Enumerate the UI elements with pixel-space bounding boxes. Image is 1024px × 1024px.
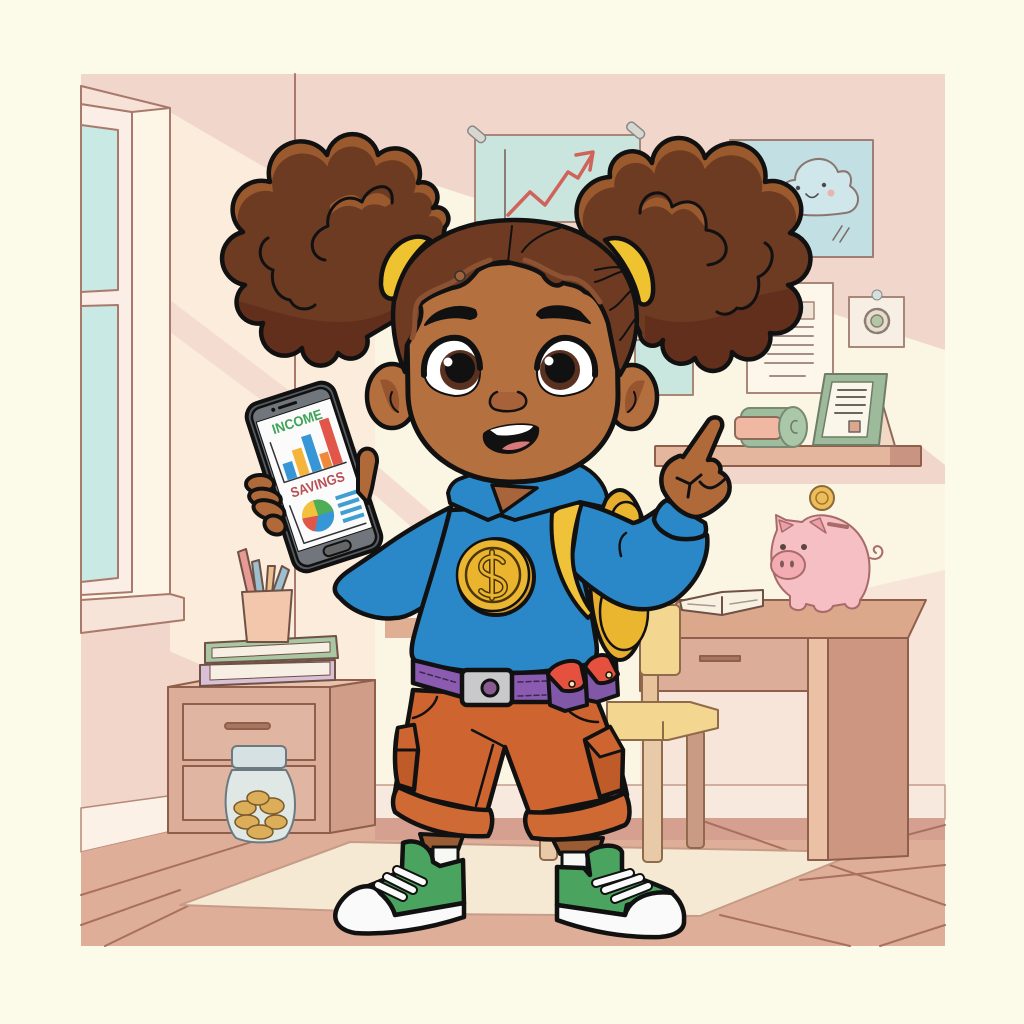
chest coin icon xyxy=(457,539,534,615)
desk xyxy=(385,600,926,860)
floor xyxy=(81,818,945,946)
eyebrow left xyxy=(425,307,476,325)
rug xyxy=(180,842,860,916)
phone screen xyxy=(256,398,372,552)
room background xyxy=(81,74,945,946)
baseboards xyxy=(81,785,945,852)
hair puff right xyxy=(577,138,833,372)
yellow strap right xyxy=(552,503,593,618)
right shoe xyxy=(557,846,684,937)
pointing hand xyxy=(661,417,730,517)
chair xyxy=(540,605,718,862)
eye left xyxy=(424,338,480,396)
head face xyxy=(407,262,618,482)
open book on desk xyxy=(680,590,763,615)
paper note xyxy=(747,283,833,393)
poster: cloud xyxy=(730,140,873,257)
hood with neck xyxy=(448,464,607,520)
shorts xyxy=(393,690,630,839)
mouth xyxy=(484,424,538,453)
legs and socks xyxy=(420,834,603,870)
piggy bank xyxy=(771,515,882,612)
pencil cup xyxy=(238,549,292,642)
pie chart xyxy=(298,495,338,536)
belt pouches xyxy=(548,655,618,711)
dresser xyxy=(168,680,375,833)
savings label: SAVINGS xyxy=(288,468,347,501)
nose xyxy=(490,392,526,411)
hand holding phone xyxy=(246,449,377,538)
girl character xyxy=(210,134,833,937)
ear left xyxy=(367,364,417,428)
left strap xyxy=(444,505,473,548)
roll on shelf xyxy=(735,407,807,447)
eyebrow right xyxy=(537,306,590,323)
sleeve cuff xyxy=(654,500,706,539)
ear right xyxy=(607,365,657,429)
books xyxy=(200,636,338,686)
picture frame on shelf xyxy=(813,374,895,446)
hair cap xyxy=(393,220,637,375)
income label: INCOME xyxy=(270,406,324,437)
falling coin xyxy=(810,486,834,510)
belt xyxy=(413,660,552,705)
left arm sleeve xyxy=(335,507,451,618)
poster: growth chart xyxy=(466,121,646,222)
income bar chart xyxy=(268,417,346,483)
torso hoodie xyxy=(412,505,597,673)
shelf xyxy=(655,446,921,466)
hair ties xyxy=(381,237,653,305)
coin jar xyxy=(226,746,295,842)
legend lines xyxy=(335,490,365,523)
illustration: girl with budgeting phone in bedroom xyxy=(80,73,946,947)
right arm sleeve xyxy=(570,503,707,609)
small poster behind head xyxy=(635,340,693,395)
window xyxy=(81,86,184,633)
eye right xyxy=(537,338,595,396)
hair puff left xyxy=(210,134,448,370)
backpack coin xyxy=(590,490,650,660)
phone xyxy=(243,379,385,575)
small frame xyxy=(849,290,904,347)
left shoe xyxy=(335,841,464,933)
